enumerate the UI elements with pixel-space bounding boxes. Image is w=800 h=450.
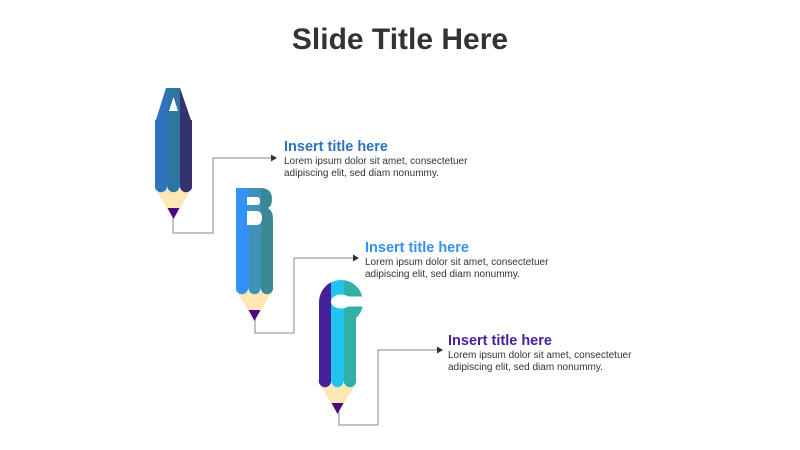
text block 2: adipiscing elit, sed diam nonummy. [365,269,520,280]
text block 1: Lorem ipsum dolor sit amet, consectetuer [284,156,467,167]
text block 3: Lorem ipsum dolor sit amet, consectetuer [448,350,631,361]
text block 2: Lorem ipsum dolor sit amet, consectetuer [365,257,548,268]
connector lines [173,158,438,425]
text block 3: Insert title here [448,333,552,349]
pencil A [155,85,192,219]
pencil C [318,280,362,414]
arrowheads [271,154,443,354]
title: Slide Title Here [292,23,508,56]
text block 1 [284,139,468,179]
pencils diagram [155,88,443,426]
text block 3 [448,333,632,373]
text block 1: adipiscing elit, sed diam nonummy. [284,168,439,179]
pencil B [236,188,274,321]
text block 3: adipiscing elit, sed diam nonummy. [448,362,603,373]
text block 1: Insert title here [284,139,388,155]
text block 2: Insert title here [365,240,469,256]
text block 2 [365,240,548,280]
